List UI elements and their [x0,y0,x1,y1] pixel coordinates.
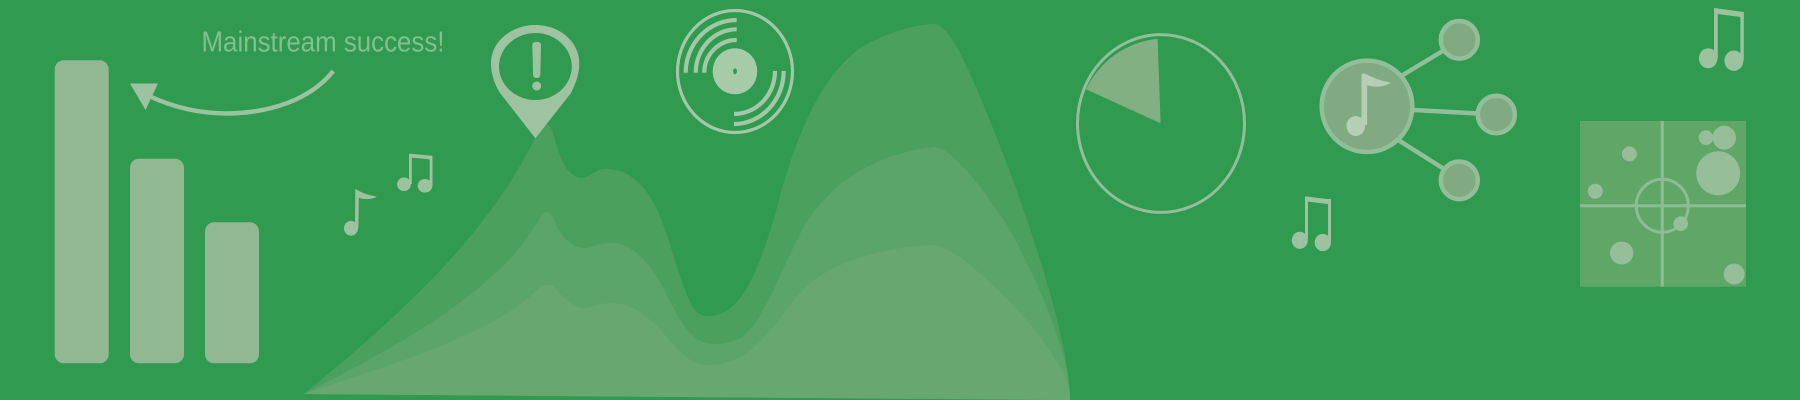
network diagram with music note [1322,21,1515,199]
area chart: back layer [304,24,1070,400]
bar chart [55,60,259,363]
soccer pitch bubble chart [1580,121,1746,287]
icon: single music note [344,189,377,236]
area chart: middle layer [304,147,1070,400]
pie chart [1078,35,1244,212]
icon: vinyl record [678,10,792,132]
icon: alert map pin [491,25,579,138]
icon: top-right double music note [1699,8,1744,71]
area chart: front layer [304,245,1070,400]
arrow: caption to tallest bar [130,71,333,114]
icon: lower double music note [1292,196,1331,251]
icon: double music note [397,154,432,193]
caption: Mainstream success: Mainstream success! [202,26,444,58]
